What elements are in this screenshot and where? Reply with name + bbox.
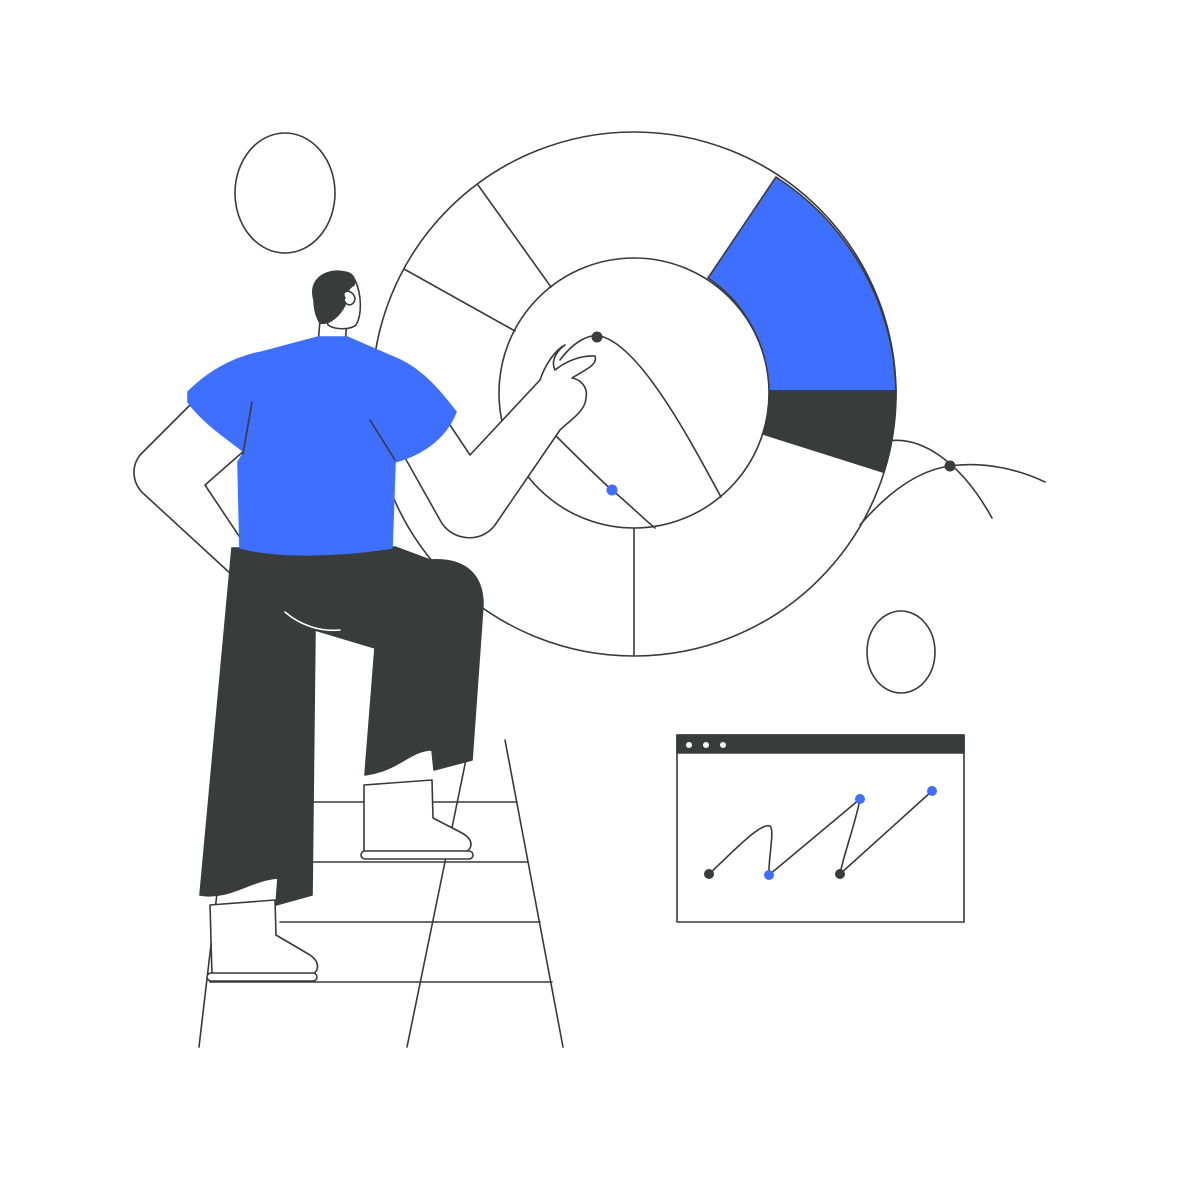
browser window line chart (677, 735, 964, 922)
decorative circle top-left (235, 133, 335, 253)
wave curve outside right (860, 440, 1045, 525)
ladder (199, 740, 563, 1047)
left boot (210, 900, 318, 975)
ear (344, 291, 355, 305)
neck (318, 320, 347, 345)
left arm (on hip) (134, 405, 245, 575)
hair (313, 271, 355, 323)
pants (200, 547, 483, 905)
person (134, 271, 595, 981)
blue segment (708, 177, 896, 391)
wave curve inside donut (540, 332, 721, 528)
right arm pointing (395, 345, 595, 538)
right boot (364, 780, 471, 853)
decorative circle small right (867, 611, 935, 693)
shirt (188, 337, 456, 555)
donut chart (372, 132, 896, 656)
dark segment (763, 391, 896, 472)
head (322, 274, 360, 329)
